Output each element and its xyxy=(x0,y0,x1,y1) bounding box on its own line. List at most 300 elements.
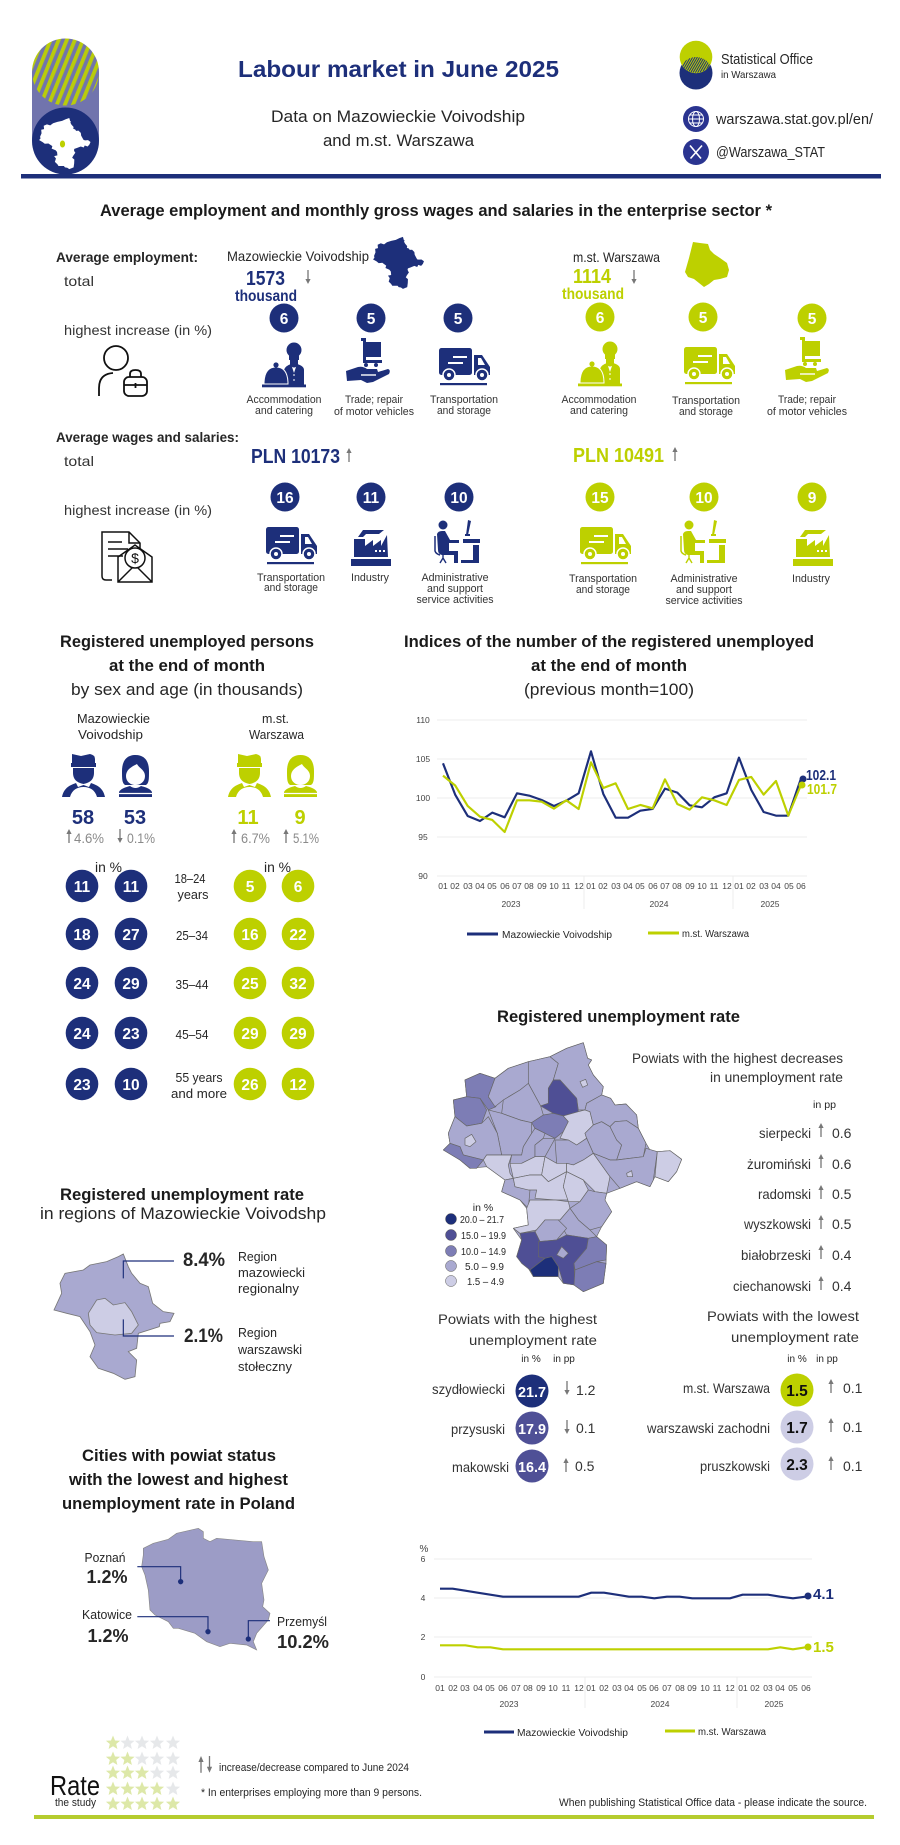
chart: indices line chart: 03 xyxy=(611,881,621,891)
legend: arrows xyxy=(198,1756,409,1774)
heading: regions rate xyxy=(40,1185,326,1223)
chart: unemployment rate over time: 0 xyxy=(421,1672,426,1682)
chart: unemployed by age: years xyxy=(178,887,209,902)
panel: Mazowieckie Voivodship employment xyxy=(227,237,498,418)
panel: Mazowieckie Voivodship employment: Accommodation xyxy=(246,394,322,406)
icon: cart on hand xyxy=(346,338,390,383)
chart: unemployment rate over time: 2 xyxy=(421,1632,426,1642)
callout: region warszawski stołeczny: stołeczny xyxy=(238,1359,292,1374)
panel: powiats with lowest rate: 2.3 xyxy=(786,1457,808,1474)
chart: indices line chart: 02 xyxy=(598,881,608,891)
chart: unemployed by age: 11 xyxy=(74,879,91,896)
heading: regions rate: Registered unemployment rate xyxy=(60,1185,304,1204)
panel: powiats with lowest rate: unemployment rate xyxy=(731,1329,859,1345)
chart: indices line chart: 12 xyxy=(722,881,732,891)
panel: powiats with highest decreases: 0.5 xyxy=(832,1216,852,1232)
chart: indices line chart: 101.7 xyxy=(807,781,837,798)
panel: powiats with highest rate: Powiats with the highest xyxy=(438,1311,597,1327)
subtitle: and m.st. Warszawa xyxy=(323,131,475,150)
heading: cities with powiat status: Cities with powiat status xyxy=(82,1446,276,1465)
panel: powiats with highest rate: in % xyxy=(521,1354,541,1365)
panel: m.st. Warszawa employment: and catering xyxy=(570,405,628,417)
panel: powiats with lowest rate: Powiats with the lowest xyxy=(707,1308,859,1324)
panel: Mazowieckie Voivodship employment: Mazowieckie Voivodship xyxy=(227,248,369,264)
chart: unemployment rate over time: 03 xyxy=(763,1683,773,1693)
chart: indices line chart: 100 xyxy=(416,793,430,803)
panel: powiats with highest rate: makowski xyxy=(452,1459,509,1475)
panel: Mazowieckie Voivodship employment: Trade; repair xyxy=(345,394,403,406)
callout: region warszawski stołeczny xyxy=(184,1325,302,1374)
chart: indices line chart: 110 xyxy=(416,715,430,725)
panel: unemployed by sex, Warszawa xyxy=(228,711,319,846)
chart: unemployment rate over time: 04 xyxy=(775,1683,785,1693)
callout: Przemyśl: Przemyśl xyxy=(277,1614,327,1629)
callout: region mazowiecki regionalny xyxy=(183,1249,305,1296)
chart: indices line chart: 08 xyxy=(524,881,534,891)
chart: indices line chart: 10 xyxy=(697,881,707,891)
map: regions of Mazowieckie xyxy=(54,1254,174,1379)
subtitle xyxy=(271,107,525,150)
chart: indices line chart: 105 xyxy=(416,754,430,764)
panel: unemployed by sex, Warszawa: 5.1% xyxy=(293,830,319,846)
panel: powiats with highest rate: szydłowiecki xyxy=(432,1381,505,1397)
panel: powiats with lowest rate: m.st. Warszawa xyxy=(683,1380,770,1396)
panel: unemployed by sex, Mazowieckie xyxy=(62,711,155,846)
chart: unemployed by age: 11 xyxy=(123,879,140,896)
chart: indices line chart: 04 xyxy=(771,881,781,891)
chart: unemployment rate over time: 04 xyxy=(624,1683,634,1693)
icon: rating stars xyxy=(106,1736,180,1810)
chart: unemployment rate over time: 06 xyxy=(498,1683,508,1693)
chart: unemployed by age: 25–34 xyxy=(176,928,208,943)
chart: unemployment rate over time: 01 xyxy=(738,1683,748,1693)
chart: indices line chart: 01 xyxy=(586,881,596,891)
chart: unemployment rate over time: % xyxy=(420,1544,429,1555)
panel: powiats with lowest rate: in pp xyxy=(816,1354,838,1365)
text: rate the study xyxy=(50,1770,100,1809)
chart: unemployment rate over time: 02 xyxy=(448,1683,458,1693)
panel: Mazowieckie Voivodship wages: PLN 10173 xyxy=(251,446,340,468)
chart: indices line chart: 102.1 xyxy=(806,767,836,784)
icon: header pill with Mazowieckie map xyxy=(32,38,99,174)
panel: m.st. Warszawa wages xyxy=(569,445,833,607)
chart: unemployment rate over time: 02 xyxy=(750,1683,760,1693)
icon: woman xyxy=(119,755,152,797)
chart: indices line chart: 05 xyxy=(487,881,497,891)
panel: powiats with lowest rate: 0.1 xyxy=(843,1458,863,1474)
panel: powiats with highest rate: 17.9 xyxy=(518,1421,546,1438)
callout: Katowice xyxy=(82,1607,132,1646)
panel: powiats with lowest rate: pruszkowski xyxy=(700,1458,770,1474)
chart: indices line chart: 11 xyxy=(710,881,719,891)
legend: unemployment rate map: 20.0 – 21.7 xyxy=(460,1215,504,1226)
chart: unemployment rate over time: 11 xyxy=(713,1683,722,1693)
text: rate the study: Rate xyxy=(50,1770,100,1801)
chart: indices line chart: 2023 xyxy=(502,899,521,909)
chart: unemployed by age: 29 xyxy=(122,976,140,993)
panel: unemployed by sex, Warszawa: 9 xyxy=(294,807,306,829)
chart: unemployed by age: in % xyxy=(95,859,122,875)
chart: unemployed by age: 16 xyxy=(241,927,259,944)
panel: unemployed by sex, Warszawa: 11 xyxy=(237,807,259,829)
panel: powiats with highest decreases: 0.5 xyxy=(832,1186,852,1202)
heading: cities with powiat status: with the lowest and highest xyxy=(68,1470,288,1489)
panel: powiats with highest decreases: in unemployment rate xyxy=(710,1069,843,1085)
panel: Mazowieckie Voivodship wages: 10 xyxy=(450,490,468,507)
icon: cart on hand xyxy=(785,337,829,382)
panel: Mazowieckie Voivodship employment: 1573 xyxy=(246,268,285,290)
chart: indices line chart: 07 xyxy=(660,881,670,891)
icon: factory xyxy=(351,530,391,566)
chart: unemployment rate over time: 10 xyxy=(548,1683,558,1693)
panel: m.st. Warszawa employment: m.st. Warszawa xyxy=(573,249,660,265)
chart: unemployed by age: 24 xyxy=(73,976,91,993)
panel: unemployed by sex, Warszawa: Warszawa xyxy=(249,727,305,742)
panel: unemployed by sex, Mazowieckie: 53 xyxy=(124,807,146,829)
panel: powiats with highest decreases: 0.4 xyxy=(832,1247,852,1263)
panel: powiats with highest decreases: 0.6 xyxy=(832,1125,852,1141)
panel: m.st. Warszawa employment: 6 xyxy=(596,310,605,327)
chart: indices line chart: 10 xyxy=(549,881,559,891)
panel: powiats with highest decreases: sierpecki xyxy=(759,1125,811,1141)
icon: chef xyxy=(262,342,306,387)
panel: m.st. Warszawa wages: 15 xyxy=(591,490,609,507)
chart: unemployed by age: 24 xyxy=(73,1026,91,1043)
panel: m.st. Warszawa wages: Administrative xyxy=(670,573,738,585)
chart: unemployment rate over time xyxy=(420,1544,834,1709)
chart: indices line chart: 95 xyxy=(418,832,428,842)
panel: m.st. Warszawa employment xyxy=(562,242,847,418)
panel: m.st. Warszawa wages: Transportation xyxy=(569,573,637,585)
panel: Mazowieckie Voivodship employment: and catering xyxy=(255,405,313,417)
panel: Mazowieckie Voivodship wages: and support xyxy=(427,583,483,595)
panel: m.st. Warszawa employment: 5 xyxy=(699,310,708,327)
panel: powiats with highest rate: 0.1 xyxy=(576,1420,596,1436)
chart: unemployment rate over time: 08 xyxy=(675,1683,685,1693)
panel: powiats with highest decreases: białobrzeski xyxy=(741,1247,811,1263)
panel: powiats with highest rate: przysuski xyxy=(451,1421,505,1437)
panel: powiats with highest decreases: 0.6 xyxy=(832,1156,852,1172)
chart: indices line chart: 01 xyxy=(438,881,448,891)
chart: indices line chart: 2024 xyxy=(650,899,669,909)
panel: Mazowieckie Voivodship wages: and storage xyxy=(264,582,318,594)
chart: unemployed by age: 55 years xyxy=(176,1070,223,1085)
icon: woman xyxy=(284,755,317,797)
chart: unemployed by age: and more xyxy=(171,1086,227,1101)
chart: unemployed by age: 6 xyxy=(294,879,303,896)
logo: Statistical Office in Warszawa: Statistical Office xyxy=(721,51,813,68)
chart: indices line chart: 09 xyxy=(537,881,547,891)
chart: unemployed by age: 25 xyxy=(241,976,259,993)
logo: Statistical Office in Warszawa: in Warszawa xyxy=(721,69,776,81)
panel: m.st. Warszawa employment: of motor vehicles xyxy=(767,406,847,418)
icon: office worker xyxy=(681,520,726,563)
panel: Mazowieckie Voivodship wages: Transportation xyxy=(257,572,325,584)
chart: unemployed by age xyxy=(66,859,314,1101)
chart: indices line chart: 07 xyxy=(512,881,522,891)
callout: Katowice: 1.2% xyxy=(88,1626,128,1646)
chart: indices line chart: 03 xyxy=(463,881,473,891)
callout: region warszawski stołeczny: warszawski xyxy=(237,1342,302,1357)
chart: unemployment rate over time: 07 xyxy=(511,1683,521,1693)
chart: unemployment rate over time: 01 xyxy=(435,1683,445,1693)
heading: registered unemployed persons: at the end of month xyxy=(109,656,265,675)
chart: unemployment rate over time: 10 xyxy=(700,1683,710,1693)
line: Mazowieckie Voivodship xyxy=(440,1589,806,1598)
panel: powiats with lowest rate: 1.5 xyxy=(786,1383,808,1400)
chart: indices line chart: 06 xyxy=(796,881,806,891)
callout: Poznań: 1.2% xyxy=(86,1567,128,1587)
panel: Mazowieckie Voivodship employment: and storage xyxy=(437,405,491,417)
chart: unemployed by age: 18 xyxy=(73,927,91,944)
panel: m.st. Warszawa employment: 5 xyxy=(808,311,817,328)
icon: Mazowieckie map xyxy=(373,237,424,289)
panel: powiats with highest rate: unemployment rate xyxy=(469,1332,597,1348)
icon: man xyxy=(228,754,271,797)
panel: m.st. Warszawa wages: 10 xyxy=(695,490,713,507)
heading: regions rate: in regions of Mazowieckie Voivodshp xyxy=(40,1204,326,1223)
panel: powiats with lowest rate: 0.1 xyxy=(843,1380,863,1396)
icon: chef xyxy=(578,342,622,386)
website link: warszawa.stat.gov.pl/en/ xyxy=(715,111,874,128)
panel: m.st. Warszawa employment: Transportation xyxy=(672,395,740,407)
chart: unemployed by age: 12 xyxy=(289,1077,307,1094)
panel: m.st. Warszawa wages: Industry xyxy=(792,573,830,585)
panel: m.st. Warszawa employment: thousand xyxy=(562,286,624,303)
panel: powiats with lowest rate xyxy=(646,1308,863,1480)
chart: unemployed by age: 35–44 xyxy=(176,977,208,992)
chart: unemployment rate over time: 12 xyxy=(574,1683,584,1693)
panel: powiats with lowest rate: 1.7 xyxy=(786,1420,808,1437)
heading: registered unemployed persons: Registered unemployed persons xyxy=(60,632,314,651)
icon: person with briefcase xyxy=(99,346,147,396)
chart: unemployment rate over time: 03 xyxy=(612,1683,622,1693)
heading: registered unemployment rate: Registered unemployment rate xyxy=(497,1007,740,1026)
panel: unemployed by sex, Warszawa: 6.7% xyxy=(241,830,270,846)
panel: Mazowieckie Voivodship wages: service activities xyxy=(416,594,494,606)
panel: unemployed by sex, Mazowieckie: Mazowieckie xyxy=(77,711,150,726)
chart: unemployment rate over time: 02 xyxy=(599,1683,609,1693)
panel: m.st. Warszawa wages: and support xyxy=(676,584,732,596)
callout: region mazowiecki regionalny: 8.4% xyxy=(183,1250,225,1271)
panel: powiats with highest decreases: Powiats with the highest decreases xyxy=(632,1050,843,1066)
panel: average employment labels: highest increase (in %) xyxy=(64,322,212,338)
legend: indices chart xyxy=(467,929,749,941)
panel: Mazowieckie Voivodship wages: Industry xyxy=(351,572,389,584)
chart: unemployed by age: 18–24 xyxy=(174,871,206,886)
icon: payslip and envelope xyxy=(102,532,152,582)
heading: registered unemployed persons xyxy=(60,632,314,699)
icon: truck xyxy=(580,527,631,564)
callout: region warszawski stołeczny: Region xyxy=(238,1325,277,1340)
chart: unemployed by age: 32 xyxy=(289,976,307,993)
X account xyxy=(683,139,825,165)
legend: unemployment rate map: 1.5 – 4.9 xyxy=(467,1277,504,1288)
panel: Mazowieckie Voivodship wages: Administrative xyxy=(422,572,488,584)
chart: unemployed by age: 29 xyxy=(241,1026,259,1043)
chart: unemployment rate over time: 2025 xyxy=(765,1699,784,1709)
panel: m.st. Warszawa wages: 9 xyxy=(808,490,817,507)
X account: @Warszawa_STAT xyxy=(716,144,825,161)
panel: powiats with highest rate: in pp xyxy=(553,1354,575,1365)
callout: Poznań: Poznań xyxy=(84,1550,126,1565)
panel: powiats with lowest rate: in % xyxy=(787,1354,807,1365)
panel: Mazowieckie Voivodship employment: of motor vehicles xyxy=(334,406,414,418)
chart: unemployed by age: in % xyxy=(264,859,291,875)
legend: rate chart: m.st. Warszawa xyxy=(698,1727,766,1738)
panel: Mazowieckie Voivodship employment: Transportation xyxy=(430,394,498,406)
legend: indices chart: Mazowieckie Voivodship xyxy=(502,930,612,941)
panel: powiats with highest decreases: in pp xyxy=(813,1100,836,1111)
chart: unemployment rate over time: 4.1 xyxy=(813,1586,834,1603)
chart: unemployment rate over time: 05 xyxy=(485,1683,495,1693)
panel: Mazowieckie Voivodship employment: thousand xyxy=(235,288,297,305)
panel: average employment labels: total xyxy=(64,273,94,289)
panel: average employment labels: Average employment: xyxy=(56,249,198,265)
panel: powiats with highest decreases xyxy=(632,1050,852,1294)
legend: unemployment rate map: 15.0 – 19.9 xyxy=(461,1231,506,1242)
chart: unemployment rate over time: 11 xyxy=(562,1683,571,1693)
panel: m.st. Warszawa wages: and storage xyxy=(576,584,630,596)
chart: indices line chart: 02 xyxy=(746,881,756,891)
chart: indices line chart: 02 xyxy=(450,881,460,891)
footnote: * In enterprises employing more than 9 persons. xyxy=(201,1787,422,1799)
subtitle: Data on Mazowieckie Voivodship xyxy=(271,107,525,126)
panel: powiats with highest decreases: żuromiński xyxy=(747,1156,811,1172)
map: powiats of Mazowieckie xyxy=(443,1043,682,1292)
chart: indices line chart: 2025 xyxy=(761,899,780,909)
source note: When publishing Statistical Office data - please indicate the source. xyxy=(559,1797,867,1809)
panel: powiats with highest decreases: radomski xyxy=(758,1186,811,1202)
chart: unemployed by age: 45–54 xyxy=(176,1027,208,1042)
panel: Mazowieckie Voivodship wages xyxy=(251,446,494,606)
panel: wages labels: highest increase (in %) xyxy=(64,502,212,518)
logo: Statistical Office in Warszawa xyxy=(680,41,813,90)
legend: indices chart: m.st. Warszawa xyxy=(682,929,749,940)
legend: unemployment rate map xyxy=(446,1202,506,1288)
heading: cities with powiat status xyxy=(62,1446,295,1513)
chart: indices line chart: 11 xyxy=(562,881,571,891)
chart: unemployment rate over time: 05 xyxy=(637,1683,647,1693)
callout: Poznań xyxy=(84,1550,128,1587)
chart: unemployed by age: 23 xyxy=(73,1077,91,1094)
panel: unemployed by sex, Mazowieckie: Voivodship xyxy=(78,727,143,742)
chart: unemployed by age: 29 xyxy=(289,1026,307,1043)
panel: Mazowieckie Voivodship wages: 16 xyxy=(276,490,294,507)
legend: unemployment rate map: in % xyxy=(473,1202,493,1214)
callout: Przemyśl: 10.2% xyxy=(277,1632,329,1652)
website link xyxy=(683,106,874,132)
chart: indices line chart: 12 xyxy=(574,881,584,891)
chart: unemployed by age: 27 xyxy=(122,927,140,944)
icon: Warszawa map xyxy=(685,242,729,287)
legend: rate chart xyxy=(484,1727,766,1739)
chart: indices line chart: 08 xyxy=(672,881,682,891)
panel: m.st. Warszawa employment: Accommodation xyxy=(562,394,636,406)
icon: truck xyxy=(266,527,317,564)
legend: unemployment rate map: 5.0 – 9.9 xyxy=(465,1262,504,1273)
callout: region mazowiecki regionalny: mazowiecki xyxy=(238,1265,305,1280)
chart: unemployment rate over time: 08 xyxy=(523,1683,533,1693)
chart: indices line chart: 06 xyxy=(648,881,658,891)
chart: unemployment rate over time: 4 xyxy=(421,1593,426,1603)
text: rate the study: the study xyxy=(55,1797,96,1809)
panel: unemployed by sex, Mazowieckie: 4.6% xyxy=(74,830,104,846)
panel: powiats with highest rate: 16.4 xyxy=(518,1459,547,1476)
panel: powiats with highest rate xyxy=(432,1311,597,1482)
panel: powiats with highest rate: 1.2 xyxy=(576,1382,596,1398)
chart: unemployment rate over time: 09 xyxy=(687,1683,697,1693)
chart: unemployment rate over time: 06 xyxy=(649,1683,659,1693)
panel: m.st. Warszawa employment: 1114 xyxy=(573,266,612,288)
heading: indices: Indices of the number of the registered unemployed xyxy=(404,632,814,651)
header rule xyxy=(21,174,881,178)
chart: unemployed by age: 22 xyxy=(289,927,307,944)
panel: unemployed by sex, Mazowieckie: 58 xyxy=(72,807,94,829)
heading: registered unemployed persons: by sex and age (in thousands) xyxy=(71,680,303,699)
chart: indices line chart: 04 xyxy=(623,881,633,891)
icon: man xyxy=(62,754,105,797)
chart: indices line chart xyxy=(416,715,837,909)
chart: unemployment rate over time: 07 xyxy=(662,1683,672,1693)
callout: Katowice: Katowice xyxy=(82,1607,132,1622)
chart: indices line chart: 01 xyxy=(734,881,744,891)
panel: m.st. Warszawa employment: Trade; repair xyxy=(778,394,836,406)
legend: unemployment rate map: 10.0 – 14.9 xyxy=(461,1247,506,1258)
panel: wages labels: Average wages and salaries: xyxy=(56,429,239,445)
heading: indices: (previous month=100) xyxy=(524,680,694,699)
line: Mazowieckie Voivodship xyxy=(443,751,801,821)
panel: average employment labels xyxy=(56,249,212,338)
panel: m.st. Warszawa wages: service activities xyxy=(666,595,743,607)
chart: unemployment rate over time: 05 xyxy=(788,1683,798,1693)
panel: Mazowieckie Voivodship employment: 5 xyxy=(367,311,376,328)
panel: powiats with highest decreases: ciechanowski xyxy=(733,1278,811,1294)
title: Labour market in June 2025 xyxy=(238,56,559,82)
panel: m.st. Warszawa employment: and storage xyxy=(679,406,733,418)
icon: factory xyxy=(793,530,833,566)
panel: wages labels xyxy=(56,429,239,518)
panel: powiats with highest decreases: 0.4 xyxy=(832,1278,852,1294)
chart: unemployment rate over time: 01 xyxy=(586,1683,596,1693)
chart: indices line chart: 09 xyxy=(685,881,695,891)
chart: unemployed by age: 26 xyxy=(241,1077,259,1094)
callout: region warszawski stołeczny: 2.1% xyxy=(184,1326,223,1347)
callout: Przemyśl xyxy=(277,1614,329,1652)
footer rule xyxy=(34,1815,874,1819)
icon: truck xyxy=(439,348,490,385)
panel: m.st. Warszawa wages: PLN 10491 xyxy=(573,445,664,467)
chart: unemployment rate over time: 06 xyxy=(801,1683,811,1693)
icon: office worker xyxy=(435,520,480,563)
panel: Mazowieckie Voivodship employment: 5 xyxy=(454,311,463,328)
legend: arrows: increase/decrease compared to June 2024 xyxy=(219,1762,409,1774)
panel: powiats with highest rate: 0.5 xyxy=(575,1458,595,1474)
panel: unemployed by sex, Warszawa: m.st. xyxy=(262,711,289,726)
chart: indices line chart: 06 xyxy=(500,881,510,891)
panel: Mazowieckie Voivodship wages: 11 xyxy=(363,490,380,507)
heading: indices: at the end of month xyxy=(531,656,687,675)
panel: unemployed by sex, Mazowieckie: 0.1% xyxy=(127,830,155,846)
chart: indices line chart: 04 xyxy=(475,881,485,891)
panel: powiats with lowest rate: warszawski zachodni xyxy=(646,1420,770,1436)
chart: unemployment rate over time: 6 xyxy=(421,1554,426,1564)
chart: indices line chart: 03 xyxy=(759,881,769,891)
icon: payslip and envelope: $ xyxy=(131,550,139,566)
heading: employment and wages: Average employment and monthly gross wages and salaries in the enterprise sector * xyxy=(100,201,772,220)
icon: truck xyxy=(684,347,735,384)
line: Warszawa xyxy=(440,1645,806,1649)
